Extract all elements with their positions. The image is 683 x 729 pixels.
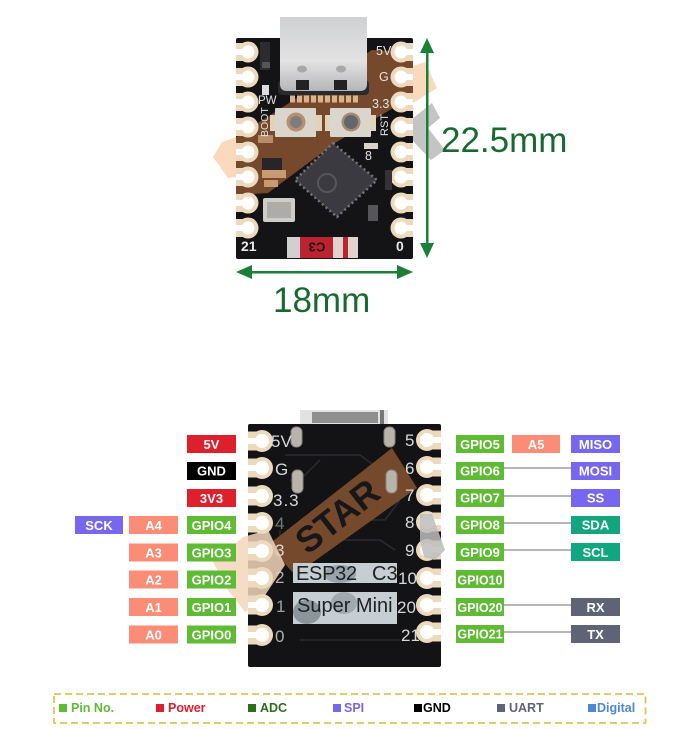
row GPIO1: GPIO1 (192, 600, 231, 615)
5V: 5V (204, 437, 220, 452)
silkscreen labels: 0 (396, 238, 404, 254)
pin numbers left: 2 (275, 568, 284, 587)
row GPIO9 (456, 543, 620, 561)
row GPIO4: GPIO4 (192, 518, 232, 533)
board body (248, 424, 441, 667)
castellated pads right (390, 42, 413, 238)
pin numbers right: 7 (405, 486, 414, 505)
row GPIO6: MOSI (579, 464, 612, 478)
boot button (275, 108, 316, 137)
row GPIO0: A0 (145, 628, 162, 642)
usb-c connector (278, 17, 369, 95)
pin numbers right: 21 (401, 626, 420, 645)
board body (236, 38, 413, 259)
grey watermark on right pads (420, 514, 445, 560)
usb pads (290, 96, 360, 102)
legend: spi: SPI (344, 701, 364, 715)
row GPIO20: GPIO20 (457, 601, 503, 615)
castellated pads left (236, 42, 258, 238)
row GPIO8: SDA (582, 518, 610, 532)
row GPIO7 (456, 489, 620, 507)
pin numbers left: 4 (275, 514, 284, 533)
row GPIO9: SCL (582, 545, 609, 560)
row GPIO7: SS (587, 490, 604, 506)
legend: digital: Digital (597, 701, 635, 715)
row GPIO20 (456, 598, 620, 616)
row GPIO5: A5 (528, 437, 544, 452)
legend: spi (333, 701, 364, 715)
row GPIO2 (129, 570, 236, 588)
row GPIO1 (129, 598, 236, 616)
pin numbers right: 6 (405, 459, 414, 478)
width label: 18mm (273, 281, 370, 320)
row GPIO21: TX (587, 627, 604, 642)
pin numbers right: 20 (397, 598, 416, 617)
legend: power: Power (168, 701, 206, 715)
silkscreen labels: PW (258, 95, 277, 107)
right pin labels (456, 435, 620, 643)
GND: GND (197, 464, 226, 478)
small parts (258, 42, 392, 221)
row GPIO7: GPIO7 (460, 490, 500, 506)
reset button (330, 108, 371, 137)
super mini label: Super Mini (297, 595, 393, 617)
pin numbers left: G (275, 460, 288, 479)
row GPIO8 (456, 516, 620, 534)
legend frame (54, 694, 646, 723)
pin numbers left: 0 (275, 627, 284, 646)
row GPIO3 (129, 544, 236, 562)
legend: pin no: Pin No. (71, 701, 114, 715)
row GPIO3: A3 (145, 546, 162, 560)
pin numbers left: 3.3 (273, 491, 300, 510)
row GPIO2: A2 (145, 572, 162, 588)
row GPIO20: RX (586, 600, 605, 615)
row GPIO21 (456, 625, 620, 643)
row GPIO6 (456, 462, 620, 480)
row GPIO10: GPIO10 (457, 574, 503, 588)
pin numbers right: 9 (405, 541, 414, 560)
row GPIO8: GPIO8 (460, 518, 500, 532)
usb connector edge (300, 410, 388, 424)
left pads (248, 430, 273, 646)
pin numbers right (397, 431, 420, 645)
esp32 chip (295, 143, 377, 217)
silkscreen labels: 3.3 (372, 97, 389, 111)
row GPIO2: GPIO2 (192, 572, 231, 588)
watermark left letter (213, 530, 285, 612)
legend: adc: ADC (260, 701, 287, 715)
connector lines (504, 468, 571, 632)
legend (54, 694, 646, 723)
pin numbers left: 3 (275, 541, 284, 560)
silkscreen labels: 21 (241, 238, 257, 254)
watermark band over board (236, 50, 413, 195)
row GPIO4: SCK (85, 518, 113, 533)
vertical dimension arrow (420, 38, 434, 258)
pin numbers right: 10 (398, 569, 417, 588)
watermark top: outside board (213, 62, 445, 178)
GND (187, 462, 236, 480)
legend: adc (248, 701, 287, 715)
pin numbers right: 8 (405, 513, 414, 532)
silkscreen labels: G (379, 70, 389, 84)
esp32 c3 label (293, 563, 398, 585)
legend: uart: UART (509, 701, 544, 715)
c3 fuse: C3 (309, 240, 325, 254)
row GPIO6: GPIO6 (460, 464, 500, 478)
super mini label (293, 592, 397, 624)
c3 fuse (287, 237, 358, 258)
pin numbers right: 5 (405, 431, 414, 450)
legend: gnd: GND (423, 701, 451, 715)
vias (291, 427, 397, 493)
row GPIO21: GPIO21 (457, 628, 503, 642)
5V (187, 435, 236, 453)
pin numbers left (271, 432, 300, 646)
silkscreen labels (241, 44, 404, 254)
row GPIO3: GPIO3 (192, 546, 231, 560)
pin numbers left: 1 (276, 597, 285, 616)
right pads (416, 429, 441, 643)
row GPIO1: A1 (145, 600, 162, 615)
row GPIO0: GPIO0 (192, 628, 231, 642)
left pin labels (75, 435, 236, 644)
row GPIO5 (456, 435, 620, 453)
watermark band (268, 448, 417, 575)
row GPIO4 (75, 516, 236, 534)
top board photo (236, 17, 413, 259)
row GPIO5: GPIO5 (460, 437, 500, 452)
silkscreen labels: 8 (365, 149, 372, 163)
bottom board (213, 410, 445, 667)
3V3 (187, 489, 236, 507)
3V3: 3V3 (200, 491, 223, 506)
silkscreen labels: BOOT (259, 107, 271, 137)
height label: 22.5mm (441, 121, 567, 160)
button side parts (270, 115, 376, 131)
row GPIO0 (129, 626, 236, 644)
horizontal dimension arrow (236, 265, 413, 279)
row GPIO9: GPIO9 (460, 545, 500, 560)
silkscreen labels: 5V (376, 44, 392, 58)
row GPIO5: MISO (579, 437, 612, 452)
esp32 c3 label: C3 (372, 563, 398, 585)
pin numbers left: 5V (271, 432, 292, 451)
silkscreen labels: RST (379, 114, 391, 136)
traces (280, 455, 400, 640)
esp32 c3 label: ESP32 (296, 563, 357, 585)
crystal (263, 198, 295, 222)
watermark band: STAR (287, 471, 387, 562)
row GPIO4: A4 (145, 518, 163, 533)
